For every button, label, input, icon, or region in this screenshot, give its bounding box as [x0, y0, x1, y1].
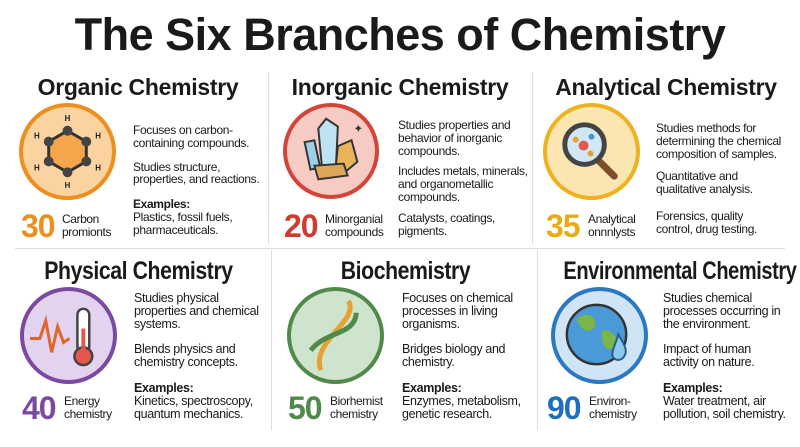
text: environmental: the environment.: [663, 317, 751, 331]
text: biochemistry: processes in living: [402, 304, 497, 318]
panel: physical: [20, 257, 259, 426]
panel: inorganic: [283, 74, 528, 244]
text: biochemistry: Enzymes, metabolism,: [402, 394, 521, 408]
text: physical: properties and chemical: [134, 304, 259, 318]
stat: 90: Environ-: [589, 394, 630, 408]
stat: 90: [547, 390, 638, 426]
stat: 50: [288, 390, 383, 426]
stat: 40: Energy: [64, 394, 100, 408]
stat: 20: 20: [284, 208, 318, 244]
stat: 30: [21, 208, 112, 244]
text: environmental: Examples:: [663, 381, 722, 395]
text: physical: systems.: [134, 317, 181, 331]
title: The Six Branches of Chemistry: [75, 9, 725, 60]
text: analytical: Forensics, quality: [656, 209, 743, 223]
text: analytical: [656, 121, 781, 236]
text: organic: containing compounds.: [133, 136, 249, 150]
text: organic: pharmaceuticals.: [133, 223, 218, 237]
text: organic: [133, 123, 259, 237]
panel: analytical: [543, 74, 781, 244]
text: inorganic: compounds.: [398, 190, 460, 204]
text: analytical: qualitative analysis.: [656, 182, 753, 196]
stat: 90: chemistry: [589, 407, 637, 421]
icon: benzene: H: [95, 163, 101, 172]
text: environmental: activity on nature.: [663, 355, 754, 369]
text: biochemistry: Focuses on chemical: [402, 291, 513, 305]
text: inorganic: Studies properties and: [398, 118, 510, 132]
text: inorganic: pigments.: [398, 224, 447, 238]
icon: benzene: H: [34, 132, 40, 141]
stat: 35: Analytical: [588, 212, 635, 226]
text: organic: Studies structure,: [133, 160, 220, 174]
text: biochemistry: [402, 291, 521, 421]
text: organic: properties, and reactions.: [133, 172, 259, 186]
icon: crystals: [283, 103, 379, 199]
text: analytical: control, drug testing.: [656, 222, 757, 236]
text: physical: Kinetics, spectroscopy,: [134, 394, 253, 408]
text: biochemistry: Bridges biology and: [402, 342, 505, 356]
text: organic: Examples:: [133, 197, 190, 211]
text: inorganic: behavior of inorganic: [398, 131, 502, 145]
stat: 35: [546, 208, 636, 244]
stat: 50: Biorhemist: [330, 394, 383, 408]
text: inorganic: and organometallic: [398, 177, 493, 191]
text: inorganic: [398, 118, 528, 238]
stat: 35: onnnlysts: [588, 225, 635, 239]
text: analytical: determining the chemical: [656, 134, 781, 148]
icon: benzene: H: [34, 163, 40, 172]
panel: environmental: [547, 257, 797, 426]
stat: 30: 30: [21, 208, 55, 244]
icon: magnifier: [543, 103, 640, 200]
stat: 20: compounds: [325, 225, 383, 239]
panel: organic: [19, 74, 259, 244]
text: environmental: [663, 291, 786, 421]
heading: inorganic: Inorganic Chemistry: [292, 74, 508, 100]
text: organic: Plastics, fossil fuels,: [133, 210, 232, 224]
text: biochemistry: chemistry.: [402, 355, 455, 369]
text: physical: Examples:: [134, 381, 193, 395]
text: physical: Studies physical: [134, 291, 219, 305]
text: physical: chemistry concepts.: [134, 355, 238, 369]
icon: benzene: H: [65, 114, 71, 123]
text: physical: [134, 291, 259, 421]
text: biochemistry: Examples:: [402, 381, 461, 395]
panel: biochemistry: [287, 257, 521, 426]
text: environmental: pollution, soil chemistry.: [663, 407, 786, 421]
stat: 40: 40: [22, 390, 56, 426]
heading: biochemistry: Biochemistry: [341, 257, 470, 285]
text: inorganic: Includes metals, minerals,: [398, 164, 528, 178]
text: environmental: Impact of human: [663, 342, 751, 356]
icon: benzene: [19, 103, 116, 200]
heading: organic: Organic Chemistry: [38, 74, 238, 100]
icon: benzene: H: [95, 132, 101, 141]
text: organic: Focuses on carbon-: [133, 123, 233, 137]
heading: analytical: Analytical Chemistry: [555, 74, 777, 100]
stat: 30: promionts: [62, 225, 111, 239]
stat: 90: 90: [547, 390, 581, 426]
stat: 40: [22, 390, 112, 426]
text: inorganic: Catalysts, coatings,: [398, 211, 495, 225]
heading: environmental: Environmental Chemistry: [563, 257, 796, 285]
text: analytical: composition of samples.: [656, 147, 777, 161]
text: environmental: processes occurring in: [663, 304, 780, 318]
text: biochemistry: organisms.: [402, 317, 460, 331]
icon: earth: [551, 287, 648, 384]
text: analytical: Studies methods for: [656, 121, 756, 135]
text: analytical: Quantitative and: [656, 169, 738, 183]
stat: 20: [284, 208, 384, 244]
text: biochemistry: genetic research.: [402, 407, 492, 421]
text: physical: quantum mechanics.: [134, 407, 243, 421]
icon: dna: [287, 287, 384, 384]
text: environmental: Studies chemical: [663, 291, 752, 305]
stat: 40: chemistry: [64, 407, 112, 421]
icon: thermometer: [20, 287, 117, 384]
stat: 20: Minorganial: [325, 212, 383, 226]
heading: physical: Physical Chemistry: [44, 257, 233, 285]
stat: 50: 50: [288, 390, 322, 426]
stat: 50: chemistry: [330, 407, 378, 421]
text: environmental: Water treatment, air: [663, 394, 766, 408]
text: physical: Blends physics and: [134, 342, 235, 356]
icon: crystals: ✦: [353, 122, 363, 135]
stat: 30: Carbon: [62, 212, 99, 226]
icon: benzene: H: [65, 181, 71, 190]
stat: 35: 35: [546, 208, 580, 244]
text: inorganic: compounds.: [398, 144, 460, 158]
